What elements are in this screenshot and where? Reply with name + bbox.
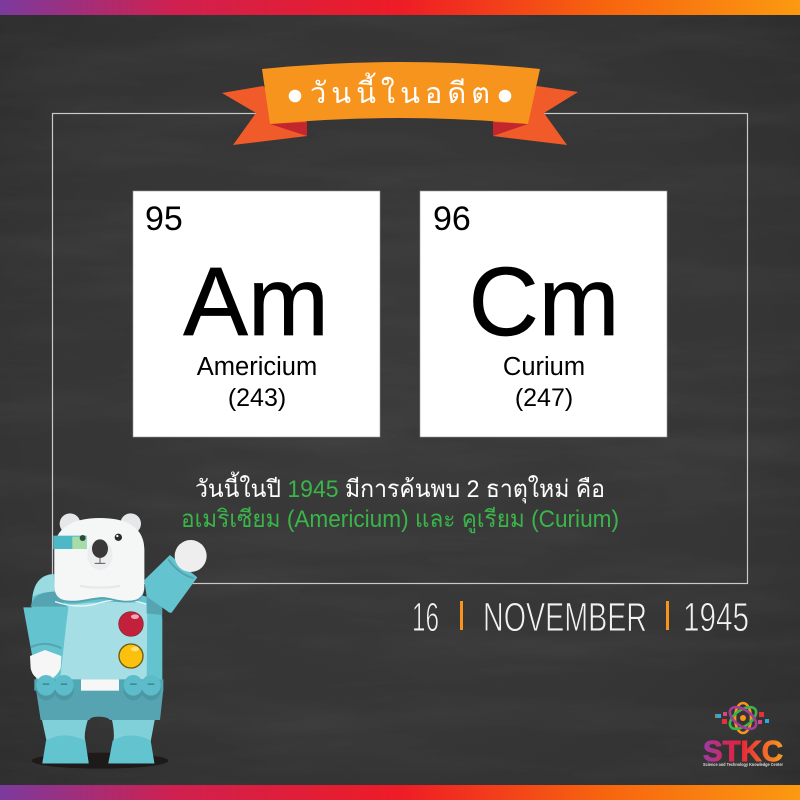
element card: americium: Americium <box>197 353 317 381</box>
bear legs <box>42 718 155 763</box>
element card: curium: Cm <box>469 247 619 356</box>
element card: americium: 95 <box>145 200 183 238</box>
description text: วันนี้ในปี 1945 มีการค้นพบ 2 ธาตุใหม่ คือ <box>195 471 605 504</box>
date: 16 November 1945: 16 <box>412 594 439 640</box>
bear pants <box>36 689 163 720</box>
description text <box>181 471 619 534</box>
bear shadow <box>32 753 168 769</box>
buttons <box>119 612 143 668</box>
date: 16 November 1945 <box>412 594 749 640</box>
bear torso <box>32 574 162 690</box>
white frame <box>52 114 748 584</box>
banner: today in the past: วันนี้ในอดีต <box>310 72 490 110</box>
belt <box>34 675 163 700</box>
banner: today in the past <box>222 62 578 145</box>
element card: americium: Am <box>183 247 329 356</box>
element card: curium: Curium <box>503 353 585 381</box>
bear ears <box>60 513 141 534</box>
element card: americium: (243) <box>228 384 286 412</box>
STKC logo <box>703 703 783 768</box>
lowered arm <box>23 607 68 680</box>
bottom gradient bar <box>0 785 800 800</box>
description text: อเมริเซียม (Americium) และ คูเรียม (Curium) <box>181 506 619 534</box>
element card: curium: (247) <box>515 384 573 412</box>
element card: curium: 96 <box>433 200 471 238</box>
element card: curium <box>420 191 667 437</box>
element card: americium <box>133 191 380 437</box>
top gradient bar <box>0 0 800 15</box>
raised arm <box>144 540 207 613</box>
date: 16 November 1945: 1945 <box>683 594 749 640</box>
logo atom icon <box>715 703 769 733</box>
polar bear robot mascot <box>23 513 207 769</box>
date: 16 November 1945: NOVEMBER <box>483 594 647 640</box>
logo wordmark: STKC <box>703 736 783 768</box>
smart glasses <box>53 535 87 549</box>
collar <box>55 600 146 606</box>
bear head <box>54 518 144 603</box>
logo tagline: Science and Technology Knowledge Center <box>703 762 783 767</box>
